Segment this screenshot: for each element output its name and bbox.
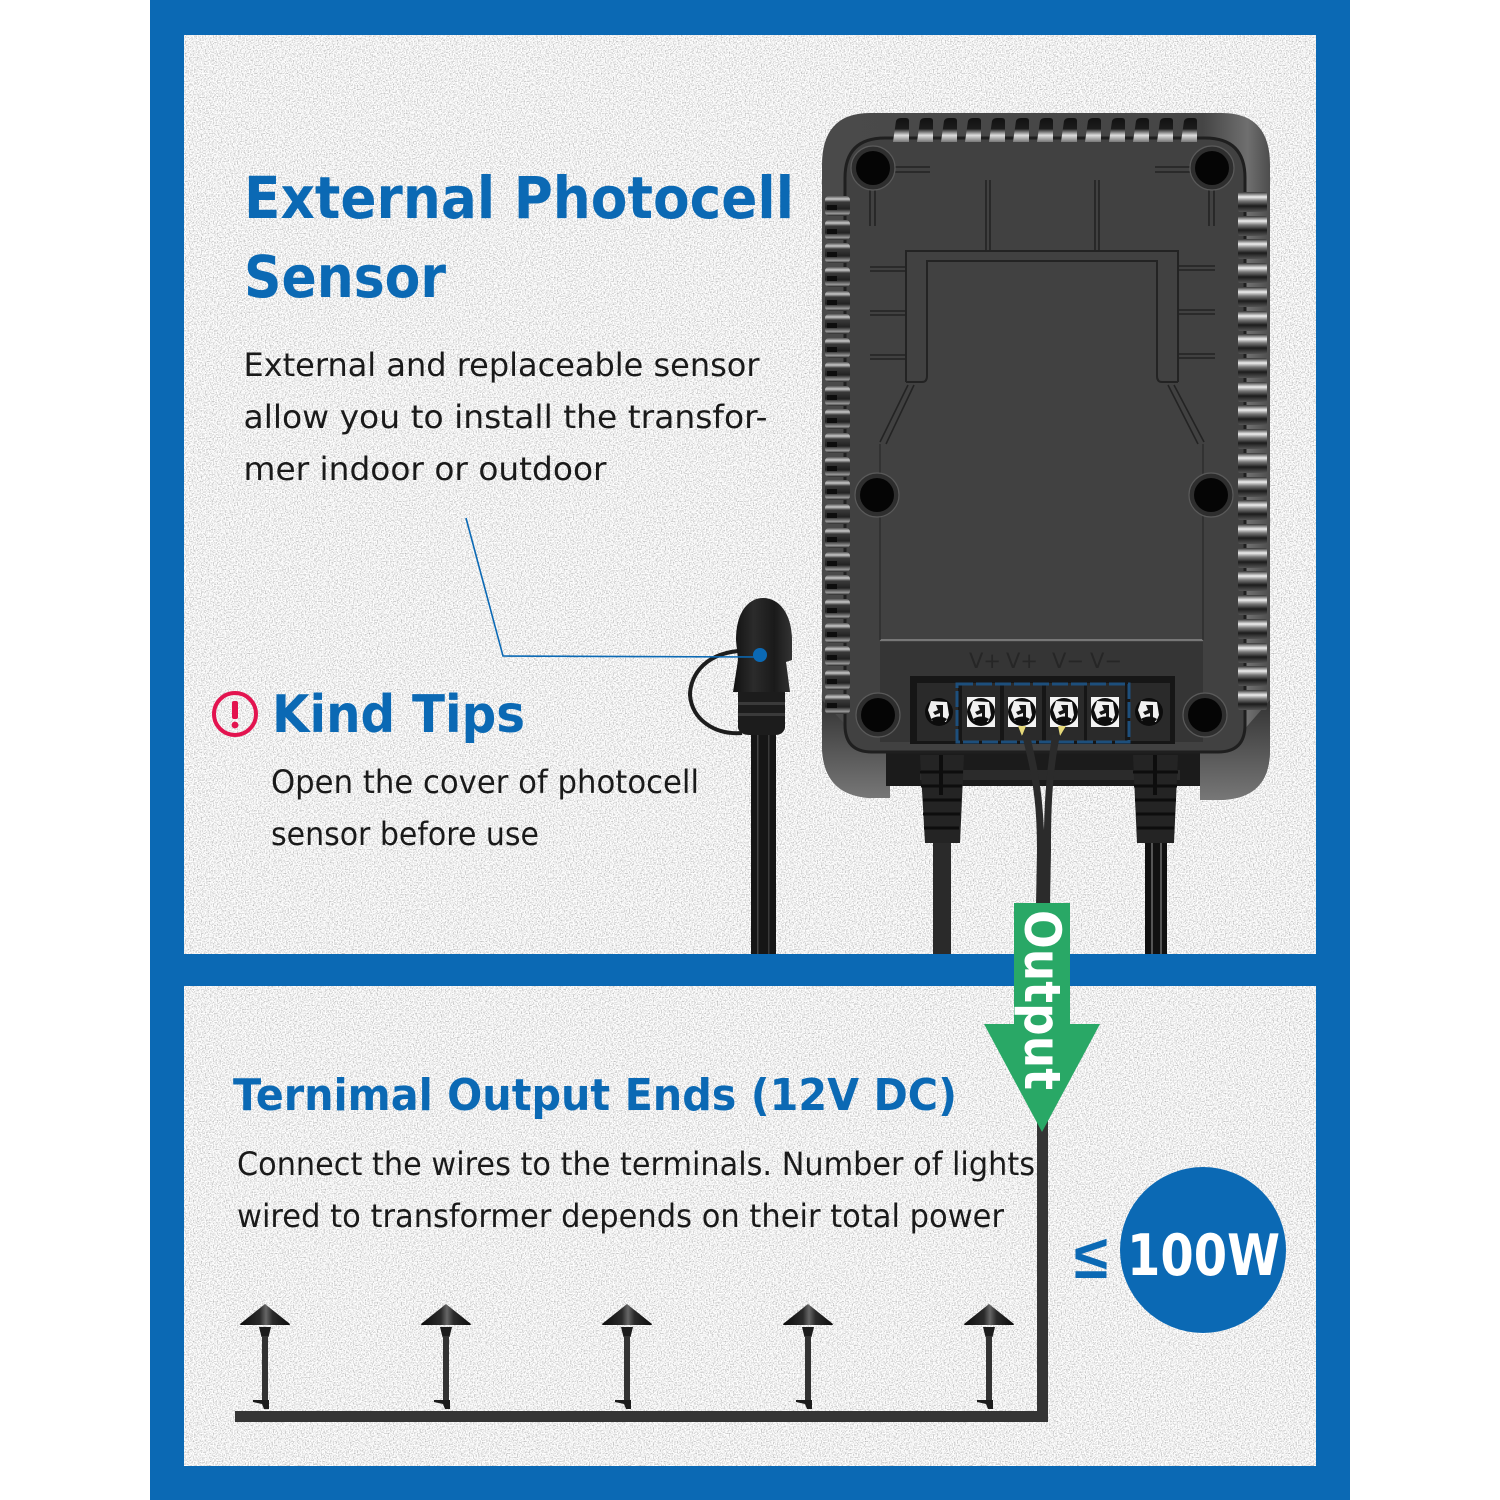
device outer shell bbox=[822, 113, 1270, 800]
device polarity labels: V+ bbox=[969, 649, 1001, 673]
device dark bottom channel bbox=[886, 750, 1200, 786]
text: terminal description: wired to transformer depends on their total power bbox=[237, 1197, 1005, 1235]
arrow: output: Output bbox=[1013, 910, 1071, 1090]
device right fins bbox=[1238, 192, 1267, 710]
panel: terminal output bbox=[184, 986, 1316, 1466]
blue frame bbox=[150, 0, 1350, 1500]
terminal block bbox=[910, 676, 1175, 744]
wiring line to lights bbox=[235, 1120, 1042, 1416]
badge: 100W: 100W bbox=[1127, 1223, 1280, 1289]
device left fins bbox=[825, 196, 850, 714]
device bottom corners bbox=[822, 700, 1270, 800]
callout line to sensor bbox=[466, 518, 767, 662]
text: kind tips description: Open the cover of photocell bbox=[271, 763, 699, 801]
device cables bbox=[933, 840, 1167, 954]
text: terminal description bbox=[237, 1145, 1035, 1235]
text: sensor description: External and replaceable sensor bbox=[244, 346, 760, 384]
strain relief right bbox=[1133, 755, 1178, 843]
device moulded ridges bbox=[870, 167, 1215, 444]
text: kind tips description: sensor before use bbox=[271, 815, 539, 853]
text: terminal description: Connect the wires to the terminals. Number of lights bbox=[237, 1145, 1035, 1183]
icon: alert bbox=[214, 693, 256, 735]
device mounting holes bbox=[851, 146, 1234, 737]
heading: external photocell sensor bbox=[244, 164, 794, 311]
text: sensor description bbox=[244, 346, 768, 488]
device inner plate bbox=[845, 138, 1245, 752]
text: sensor description: allow you to install the transfor- bbox=[244, 398, 768, 436]
transformer device bbox=[822, 113, 1270, 954]
device polarity labels: V− bbox=[1090, 649, 1122, 673]
heading: external photocell sensor: Sensor bbox=[244, 243, 446, 311]
device top fins bbox=[893, 118, 1197, 142]
heading: terminal output ends: Ternimal Output Ends (12V DC) bbox=[233, 1070, 957, 1121]
symbol: less than or equal: ≤ bbox=[1074, 1223, 1108, 1292]
heading: kind tips: Kind Tips bbox=[272, 685, 525, 745]
device polarity labels: V− bbox=[1052, 649, 1084, 673]
text: kind tips description bbox=[271, 763, 699, 853]
photocell sensor with cable bbox=[690, 598, 792, 954]
device lower section bbox=[880, 642, 1203, 742]
lights row bbox=[240, 1304, 1014, 1409]
device polarity labels: V+ bbox=[1006, 649, 1038, 673]
heading: external photocell sensor: External Photocell bbox=[244, 164, 794, 232]
badge: 100W bbox=[1120, 1167, 1286, 1333]
strain relief left bbox=[920, 755, 964, 843]
output wires bbox=[1022, 735, 1060, 905]
text: sensor description: mer indoor or outdoor bbox=[244, 450, 607, 488]
panel: photocell sensor bbox=[184, 35, 1316, 954]
arrow: output bbox=[984, 903, 1100, 1132]
device polarity labels bbox=[969, 649, 1122, 673]
